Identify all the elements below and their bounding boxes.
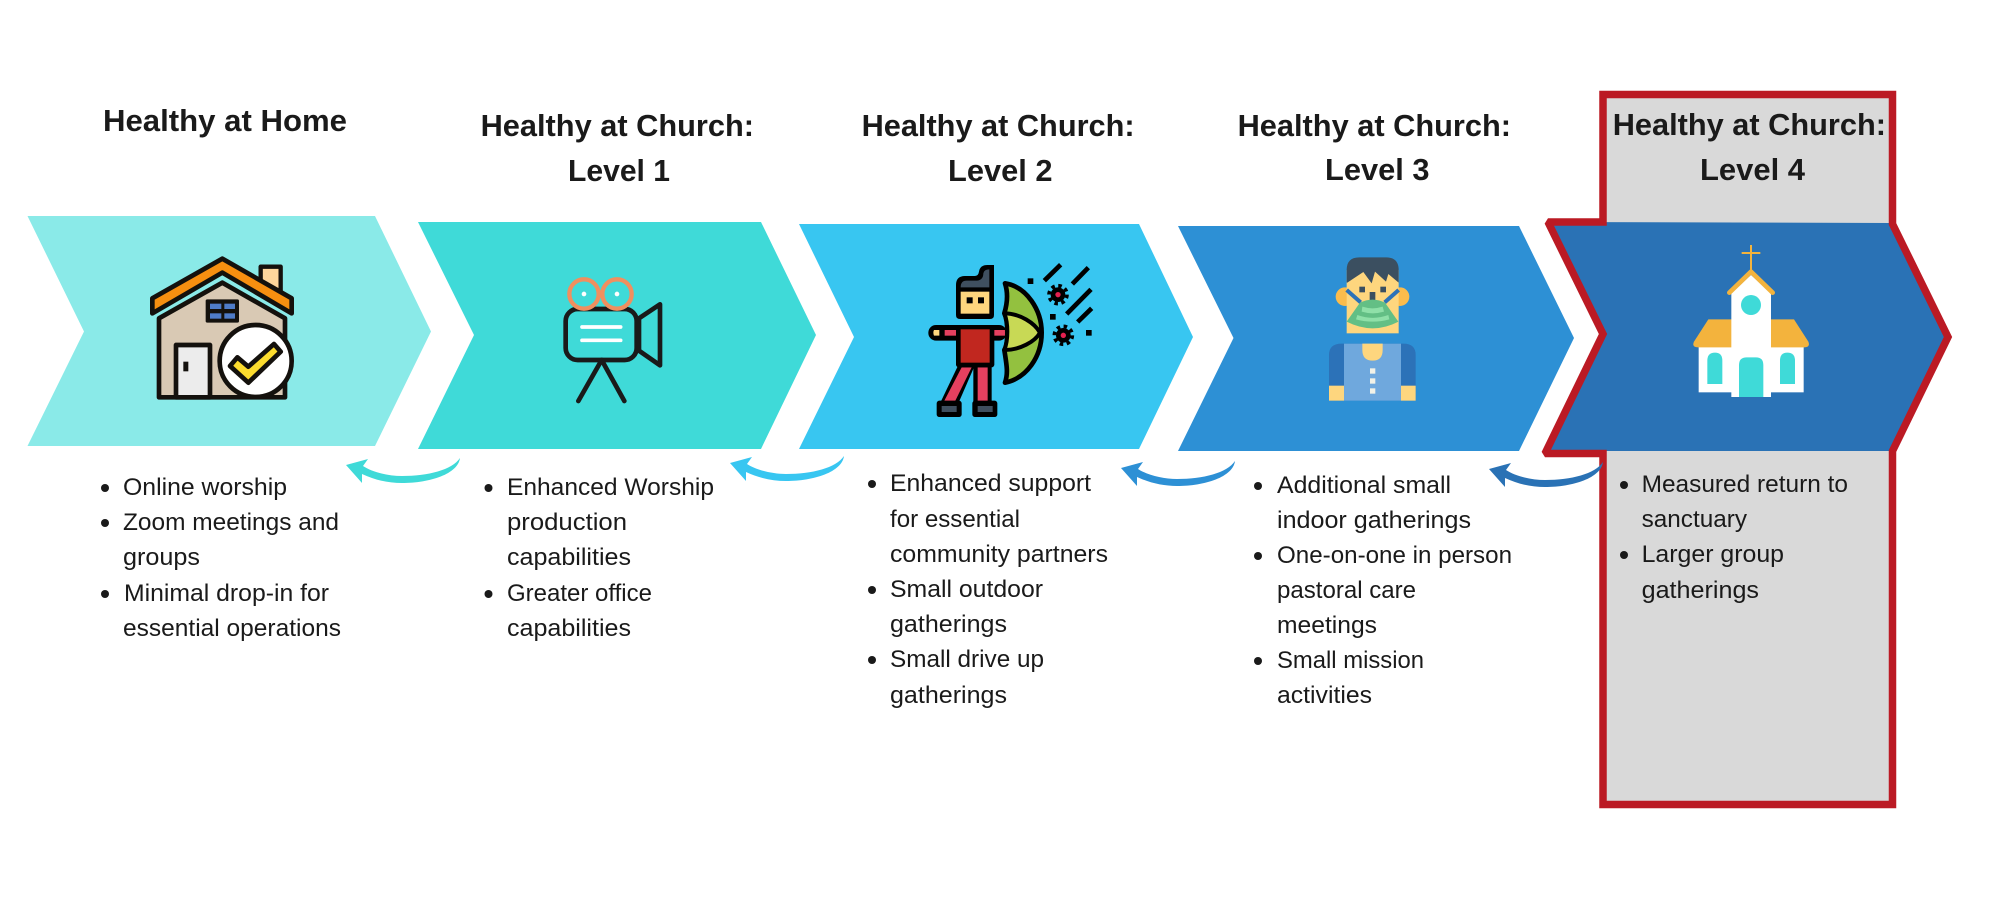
text block: level 3 bullets: Additional small xyxy=(1277,472,1451,499)
heading: level 2: Level 2 xyxy=(948,153,1052,188)
text block: level 3 bullets: One-on-one in person xyxy=(1277,542,1512,569)
chevron: level 2 xyxy=(799,224,1193,449)
chevron: level 4 blue body xyxy=(1545,222,1948,451)
text block: level 3 bullets: activities xyxy=(1277,682,1372,709)
text block: level 3 bullets: Small mission xyxy=(1277,647,1424,674)
text block: level 1 bullets: production xyxy=(507,509,627,536)
heading: level 1 xyxy=(481,108,754,188)
icon: house with check mark xyxy=(152,259,292,397)
heading: level 1: Level 1 xyxy=(568,153,670,188)
panel: level 4 highlight column xyxy=(1603,94,1892,804)
heading: level 4: Level 4 xyxy=(1700,152,1806,187)
text block: level 2 bullets: Enhanced support xyxy=(890,470,1091,497)
arrow: level 1 back to home xyxy=(346,458,460,483)
text block: level 4 bullets: sanctuary xyxy=(1642,506,1747,533)
text block: level 3 bullets: indoor gatherings xyxy=(1277,507,1471,534)
text block: healthy at home bullets: essential operations xyxy=(123,615,341,642)
text block: healthy at home bullets: Online worship xyxy=(123,474,287,501)
arrow: level 4 back to level 3 xyxy=(1489,462,1603,487)
text block: level 4 bullets: Measured return to xyxy=(1642,471,1848,498)
heading: level 3 xyxy=(1238,108,1511,187)
text block: level 3 bullets: meetings xyxy=(1277,612,1377,639)
arrow: level 2 back to level 1 xyxy=(730,456,844,481)
chevron: healthy at home xyxy=(28,216,431,446)
heading: level 3: Level 3 xyxy=(1325,152,1430,187)
text block: level 4 bullets xyxy=(1620,471,1848,604)
text block: level 1 bullets: Enhanced Worship xyxy=(507,474,714,501)
text block: level 2 bullets: gatherings xyxy=(890,611,1007,638)
heading: level 4: Healthy at Church: xyxy=(1613,107,1886,142)
text block: level 3 bullets: pastoral care xyxy=(1277,577,1416,604)
text block: level 2 bullets: community partners xyxy=(890,541,1108,568)
text block: healthy at home bullets: groups xyxy=(123,544,200,571)
heading: level 1: Healthy at Church: xyxy=(481,108,754,143)
text block: level 2 bullets: Small drive up xyxy=(890,646,1044,673)
arrow: level 3 back to level 2 xyxy=(1121,461,1235,486)
icon: video camera xyxy=(566,279,660,401)
text block: level 1 bullets: capabilities xyxy=(507,615,631,642)
icon: church xyxy=(1693,245,1809,397)
text block: healthy at home bullets: Zoom meetings and xyxy=(123,509,339,536)
text block: level 3 bullets xyxy=(1254,472,1512,709)
text block: healthy at home bullets: Minimal drop-in for xyxy=(124,580,329,607)
text block: healthy at home bullets xyxy=(101,474,341,642)
text block: level 2 bullets: gatherings xyxy=(890,682,1007,709)
text block: level 2 bullets: Small outdoor xyxy=(890,576,1043,603)
chevron: level 4 red outline xyxy=(1545,94,1948,804)
text block: level 1 bullets: capabilities xyxy=(507,544,631,571)
text block: level 1 bullets: Greater office xyxy=(507,580,652,607)
chevron: level 1 xyxy=(418,222,816,449)
chevron: level 3 xyxy=(1178,226,1574,451)
text block: level 2 bullets: for essential xyxy=(890,506,1020,533)
heading: level 2 xyxy=(862,108,1135,188)
text block: level 2 bullets xyxy=(868,470,1108,709)
text block: level 1 bullets xyxy=(484,474,714,642)
heading: level 2: Healthy at Church: xyxy=(862,108,1135,143)
heading: level 4 xyxy=(1613,107,1886,187)
heading: healthy at home: Healthy at Home xyxy=(103,103,347,138)
heading: level 3: Healthy at Church: xyxy=(1238,108,1511,143)
icon: person with umbrella blocking virus xyxy=(928,265,1092,417)
text block: level 4 bullets: gatherings xyxy=(1642,577,1759,604)
icon: man wearing mask xyxy=(1329,257,1416,401)
text block: level 4 bullets: Larger group xyxy=(1642,541,1784,568)
